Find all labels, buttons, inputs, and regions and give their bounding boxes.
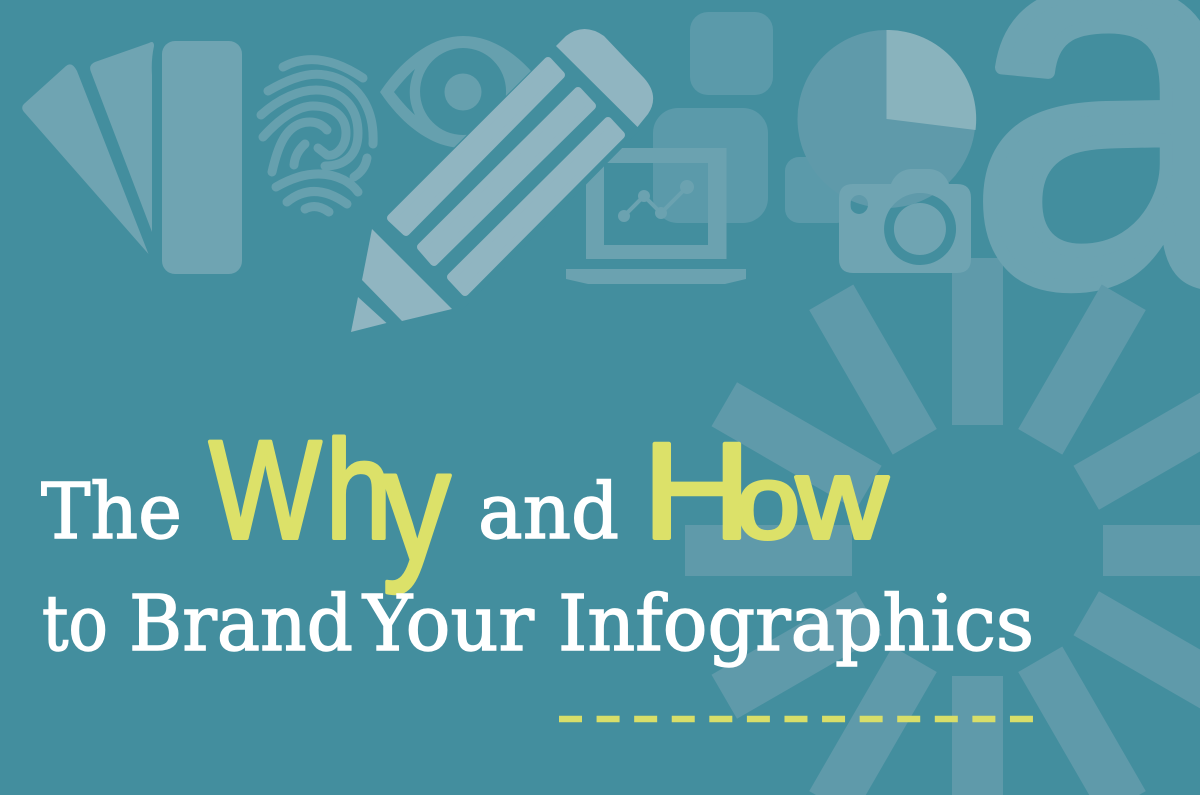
- title line 2: Your: [362, 580, 534, 669]
- title accent: How: w: [795, 434, 888, 563]
- title accent: Why: [209, 411, 450, 594]
- icon: pencil: [351, 29, 653, 332]
- rounded square middle: [653, 108, 768, 223]
- icon: camera: [839, 169, 971, 273]
- dashed accent line: [559, 716, 1033, 722]
- sunburst bar over letter: [1018, 284, 1146, 455]
- title line 2: [42, 580, 1034, 669]
- sunburst bars: [685, 258, 1200, 795]
- icon: pie chart: [798, 30, 976, 208]
- title accent: Why: W: [209, 411, 322, 568]
- title line 2: Brand: [129, 580, 353, 669]
- title line 2: Infographics: [558, 580, 1034, 669]
- title accent: How: H: [642, 414, 751, 567]
- icon: laptop with line chart: [566, 148, 746, 284]
- rounded square small: [785, 157, 851, 223]
- rounded square top: [690, 12, 773, 95]
- icon: colour swatch fan: [22, 41, 242, 274]
- title accent: How: [642, 414, 888, 567]
- title accent: Why: h: [326, 411, 392, 568]
- title line 1: The: The: [41, 468, 182, 557]
- title line 2: to: [42, 580, 108, 669]
- icon: eye: [380, 36, 547, 148]
- title accent: How: o: [736, 444, 800, 561]
- title line 1: and: and: [478, 468, 619, 557]
- title accent: Why: y: [383, 417, 450, 594]
- icon: fingerprint: [261, 60, 373, 212]
